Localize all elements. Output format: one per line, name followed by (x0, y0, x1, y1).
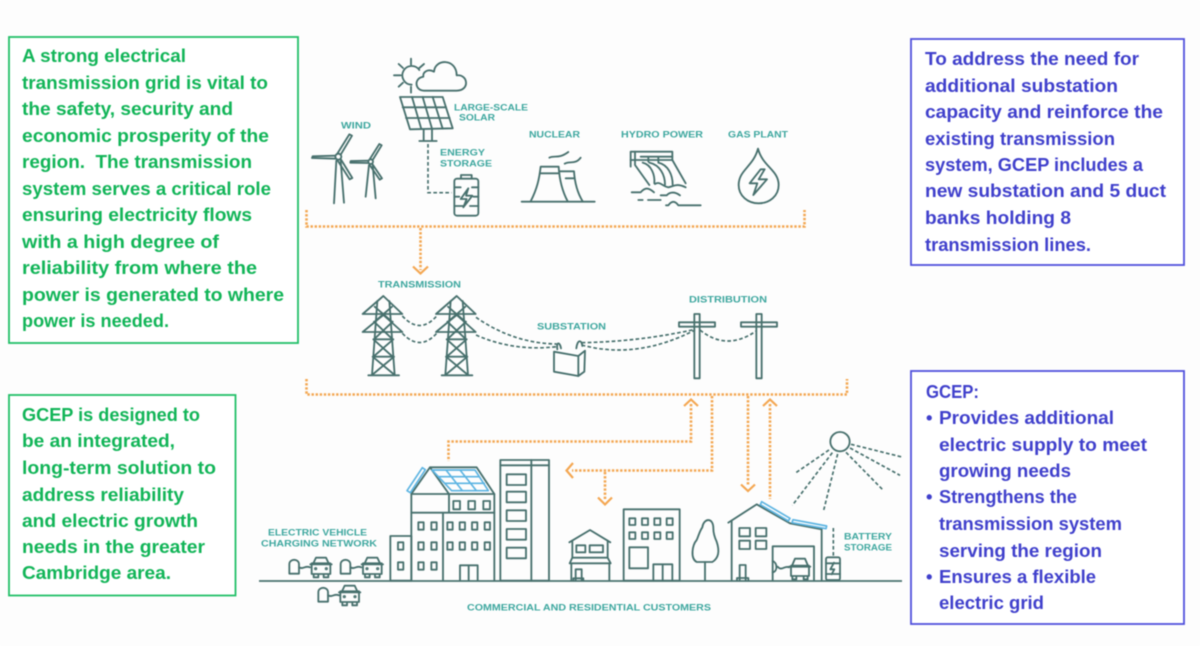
icon: solar panel (400, 97, 453, 141)
panel: GCEP integrated solution text: and electric growth (22, 510, 198, 531)
panel: GCEP benefits list: Provides additional (939, 407, 1114, 428)
labels (261, 102, 893, 614)
icon: EV charger and car 1 (289, 558, 332, 577)
panel: GCEP integrated solution text: long-term solution to (22, 457, 216, 478)
panel: substation capacity text: new substation and 5 duct (925, 180, 1166, 201)
panel: GCEP benefits list: Ensures a flexible (939, 566, 1096, 587)
dashed power lines (402, 316, 557, 348)
panel: grid importance text: region. The transmission (22, 151, 252, 172)
city: EV chargers and apartment buildings (289, 460, 549, 605)
panel: grid importance text: economic prosperity of the (22, 125, 269, 146)
icon: sun with rays (792, 432, 903, 512)
panel: grid importance text: A strong electrical (22, 45, 186, 66)
icon: house with garage and battery (728, 504, 840, 581)
panel: GCEP integrated solution text: needs in the greater (22, 536, 205, 557)
icon: office building (624, 509, 680, 581)
panel: grid importance text: power is generated to where (22, 284, 284, 305)
panel: GCEP benefits list: • (926, 486, 932, 507)
icon: sun and cloud (394, 59, 466, 93)
panel: grid importance text (9, 37, 298, 343)
icon: hydro dam (631, 152, 701, 205)
panel: GCEP benefits list: • (926, 407, 932, 428)
panel: GCEP benefits list: GCEP: (926, 381, 979, 402)
storage link (428, 144, 452, 193)
labels: STORAGE (440, 158, 492, 170)
panel: substation capacity text (911, 39, 1184, 265)
panel: substation capacity text: banks holding 8 (925, 207, 1071, 228)
panel: substation capacity text: existing transmission (925, 128, 1115, 149)
icon: wind turbines (312, 134, 382, 203)
labels: ELECTRIC VEHICLE (268, 528, 367, 538)
labels: ENERGY (440, 148, 486, 158)
panel: grid importance text: system serves a critical role (22, 178, 271, 199)
panel: substation capacity text: transmission lines. (925, 234, 1091, 255)
panel: GCEP integrated solution text: be an integrated, (22, 430, 175, 451)
panel: grid importance text: ensuring electricity flows (22, 204, 252, 225)
battery link (831, 528, 836, 556)
panel: GCEP integrated solution text: address reliability (22, 484, 185, 505)
lower orange connectors (306, 379, 847, 504)
labels: LARGE-SCALE (454, 102, 528, 114)
icon: distribution pole 2 (741, 314, 777, 378)
panel: GCEP benefits list: electric supply to meet (939, 434, 1147, 455)
panel: GCEP integrated solution text: GCEP is designed to (22, 404, 200, 425)
labels: SOLAR (459, 112, 495, 124)
labels: COMMERCIAL AND RESIDENTIAL CUSTOMERS (467, 602, 711, 614)
panel: substation capacity text: capacity and reinforce the (925, 101, 1163, 122)
panel: GCEP benefits list: • (926, 566, 932, 587)
panel: GCEP benefits list: electric grid (939, 592, 1044, 613)
panel: grid importance text: the safety, security and (22, 98, 233, 119)
labels: STORAGE (844, 542, 892, 554)
labels: WIND (341, 120, 371, 132)
panel: substation capacity text: additional substation (925, 75, 1118, 96)
neighbourhood: houses, tree, sun (569, 432, 903, 581)
labels: BATTERY (844, 532, 893, 542)
distribution poles and lines (582, 314, 777, 378)
icon: small side building (390, 536, 411, 581)
labels: NUCLEAR (529, 130, 580, 140)
panel: substation capacity text: To address the need for (925, 48, 1139, 69)
panel: grid importance text: transmission grid is vital to (22, 72, 268, 93)
icon: tree (692, 520, 718, 581)
panel: GCEP benefits list (911, 371, 1184, 624)
panel: grid importance text: power is needed. (22, 310, 169, 331)
labels: HYDRO POWER (621, 130, 703, 140)
icon: transmission tower 1 (363, 296, 402, 375)
icon: battery (454, 175, 478, 216)
icon: gas flame drop (739, 149, 779, 203)
labels: GAS PLANT (728, 130, 788, 140)
labels: CHARGING NETWORK (261, 538, 377, 550)
panel: grid importance text: reliability from where the (22, 257, 257, 278)
panel: GCEP benefits list: growing needs (939, 460, 1071, 481)
labels: TRANSMISSION (378, 280, 461, 290)
icon: roof solar panels (760, 502, 827, 529)
icon: rooftop solar panels (407, 468, 488, 493)
panel: GCEP integrated solution text: Cambridge area. (22, 562, 171, 583)
icon: EV charger and car 3 (318, 586, 360, 605)
icon: distribution pole 1 (679, 314, 715, 378)
icon: tall tower (500, 460, 549, 581)
icon: nuclear cooling towers (522, 152, 595, 202)
panel: GCEP benefits list: serving the region (939, 540, 1102, 561)
generation row: nuclear, hydro, gas icons (522, 149, 779, 205)
top orange connector (306, 210, 804, 274)
panel: grid importance text: with a high degree of (21, 231, 220, 252)
panel: GCEP integrated solution text (9, 395, 236, 596)
panel: GCEP benefits list: transmission system (939, 513, 1122, 534)
transmission towers and lines (363, 296, 585, 376)
panel: substation capacity text: system, GCEP includes a (925, 154, 1144, 175)
labels: SUBSTATION (537, 322, 606, 332)
icon: EV charger and car 2 (341, 558, 383, 577)
icon: transmission tower 2 (436, 296, 476, 375)
dashed wires (582, 329, 757, 350)
panel: GCEP benefits list: Strengthens the (939, 486, 1077, 507)
generation row: wind, solar, storage icons (312, 59, 478, 216)
icon: small house (569, 530, 611, 581)
labels: DISTRIBUTION (689, 294, 767, 306)
icon: substation (554, 341, 585, 376)
icon: main apartment building with solar roof (411, 467, 494, 581)
ground line (259, 580, 902, 582)
